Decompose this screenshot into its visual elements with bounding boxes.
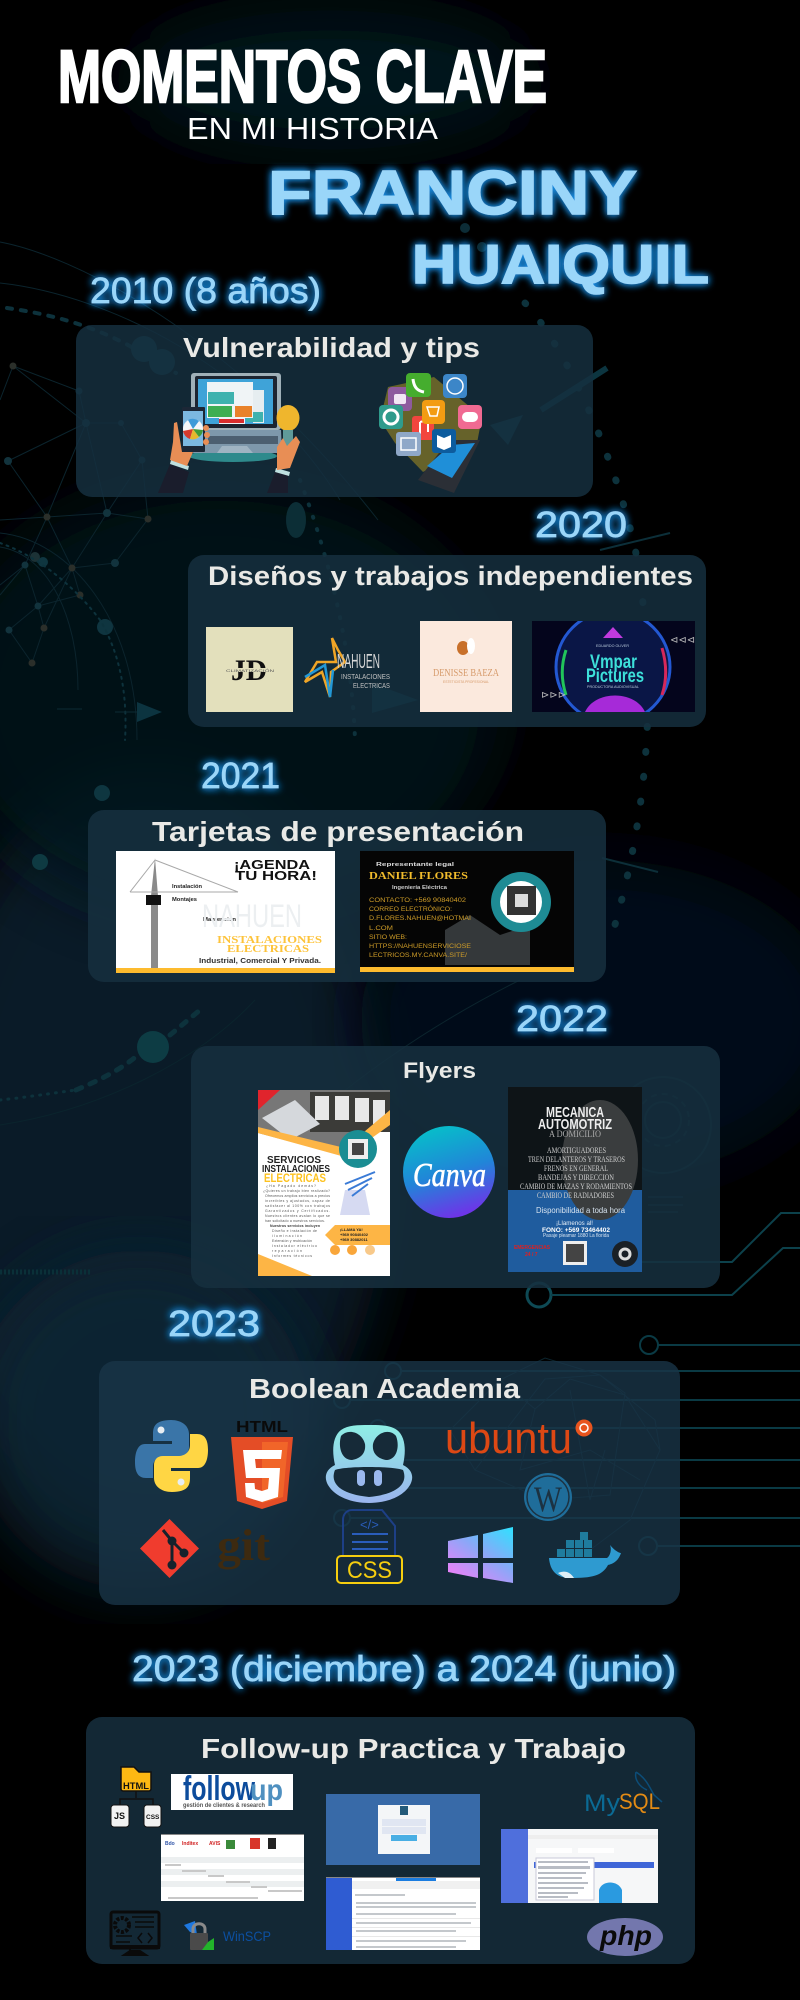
flyer: servicios instalaciones eléctricas: INSTALACIONES — [262, 1164, 330, 1175]
icon: html js css tree: CSS — [146, 1814, 160, 1821]
flyer: mecánica automotriz: CAMBIO DE MAZAS Y RODAMIENTOS — [520, 1182, 632, 1191]
icon: css file — [337, 1510, 402, 1584]
panel heading: Vulnerabilidad y tips — [183, 332, 480, 363]
panel: flyers — [191, 1046, 720, 1288]
card: agenda tu hora: TU HORA! — [235, 868, 317, 883]
title: Momentos clave: MOMENTOS CLAVE — [58, 35, 547, 118]
flyer: mecánica automotriz: ¡Llamenos al! — [556, 1221, 593, 1227]
screenshot: login — [326, 1794, 480, 1865]
icon: Canva logo: Canva — [413, 1157, 486, 1194]
card: agenda tu hora: Mantención — [203, 917, 236, 923]
year: 2010: 2010 (8 años) — [90, 270, 321, 311]
card: Daniel Flores: Ingeniería Eléctrica — [392, 885, 447, 891]
icon: smartphone with apps — [379, 373, 482, 493]
flyer: servicios instalaciones eléctricas: ¿Quieres un trabajo bien realizado? — [263, 1189, 330, 1193]
icon: html js css tree — [111, 1767, 161, 1827]
logo: Denisse Baeza: DENISSE BAEZA — [433, 668, 500, 679]
panel heading: Follow-up Practica y Trabajo — [201, 1733, 626, 1764]
icon: Canva logo — [403, 1126, 495, 1218]
flyer: servicios instalaciones eléctricas: ¿Ha Pagado demás? — [266, 1184, 316, 1188]
panel: boolean academia — [99, 1361, 680, 1605]
panel heading: Tarjetas de presentación — [152, 816, 524, 847]
card: agenda tu hora: Montajes — [172, 897, 197, 903]
logo: php: php — [599, 1920, 652, 1951]
year: 2021: 2021 — [201, 755, 280, 796]
name: Huaiquil: HUAIQUIL — [412, 233, 709, 295]
icon: docker — [549, 1532, 621, 1578]
card: agenda tu hora: NAHUEN — [202, 898, 302, 934]
icon: monitor with code — [110, 1912, 160, 1955]
year: 2022: 2022 — [516, 998, 608, 1039]
panel heading: Diseños y trabajos independientes — [208, 561, 693, 591]
icon: python — [135, 1420, 208, 1492]
flyer: servicios instalaciones eléctricas — [258, 1090, 390, 1276]
logo: Nahuen: ELECTRICAS — [353, 683, 390, 690]
icon: html js css tree: HTML — [123, 1781, 150, 1791]
icon: rounded mascot logo — [326, 1425, 412, 1503]
panel: follow-up práctica y trabajo — [86, 1717, 695, 1964]
panel: vulnerabilidad y tips — [76, 325, 593, 497]
flyer: servicios instalaciones eléctricas: reparación — [272, 1249, 302, 1253]
card: Daniel Flores: DANIEL FLORES — [369, 870, 468, 882]
flyer: servicios instalaciones eléctricas: Instalador eléctrico — [272, 1244, 317, 1248]
logo: Nahuen: NAHUEN — [337, 651, 380, 673]
flyer: servicios instalaciones eléctricas: increíbles y ajustados, capaz de — [265, 1199, 330, 1203]
flyer: mecánica automotriz: 24 / 7 — [525, 1252, 538, 1258]
flyer: mecánica automotriz: TREN DELANTEROS Y TRASEROS — [528, 1155, 625, 1164]
subtitle: EN MI HISTORIA — [187, 111, 438, 146]
logo: winscp — [184, 1921, 271, 1950]
card: agenda tu hora: ELECTRICAS — [227, 943, 309, 955]
card: agenda tu hora: Industrial, Comercial Y Privada. — [199, 958, 321, 965]
icon: css file: CSS — [347, 1557, 392, 1584]
icon: css file: </> — [360, 1517, 379, 1532]
screenshot: tabla de clientes: AVIS — [209, 1841, 221, 1847]
logo: Denisse Baeza — [420, 621, 512, 712]
flyer: servicios instalaciones eléctricas: ELECTRICAS — [264, 1171, 326, 1185]
flyer: mecánica automotriz: BANDEJAS Y DIRECCION — [538, 1173, 614, 1182]
flyer: mecánica automotriz: Disponibilidad a toda hora — [536, 1206, 626, 1215]
flyer: servicios instalaciones eléctricas: Extensión y reubicación — [272, 1239, 312, 1243]
logo: Vmpar Pictures: ⊲⊲⊲ — [670, 635, 695, 646]
card: Daniel Flores: D.FLORES.NAHUEN@HOTMAI — [369, 916, 471, 922]
flyer: servicios instalaciones eléctricas: han solicitado a nuestros servicios. — [265, 1219, 325, 1223]
year: 2023: 2023 — [168, 1303, 260, 1344]
logo: JD climatización — [206, 627, 293, 712]
icon: html js css tree: JS — [114, 1811, 125, 1821]
card: Daniel Flores: L.COM — [369, 926, 393, 932]
screenshot: dashboard — [501, 1829, 658, 1903]
flyer: mecánica automotriz: FONO: +569 73464402 — [542, 1228, 611, 1234]
logo: Vmpar Pictures: Pictures — [586, 666, 644, 687]
flyer: servicios instalaciones eléctricas: Nuestros servicios incluyen — [270, 1224, 320, 1228]
icon: wordpress: W — [534, 1479, 562, 1519]
logo: followup: up — [250, 1774, 283, 1807]
logo: php — [587, 1918, 663, 1956]
logo: JD climatización: JD — [231, 654, 267, 687]
logo: followup: follow — [183, 1770, 255, 1808]
panel: diseños y trabajos independientes — [188, 555, 706, 727]
card: Daniel Flores: Representante legal — [376, 862, 455, 868]
card: agenda tu hora: INSTALACIONES — [217, 934, 322, 946]
flyer: servicios instalaciones eléctricas: satisfacer al 100% con trabajos — [265, 1204, 330, 1208]
text: git wordmark: git — [217, 1521, 270, 1570]
screenshot: tabla de clientes — [161, 1834, 304, 1901]
flyer: mecánica automotriz: EMERGENCIAS — [514, 1245, 551, 1251]
card: Daniel Flores: HTTPS://NAHUENSERVICIOSE — [369, 944, 471, 950]
panel heading: Flyers — [403, 1058, 476, 1083]
flyer: mecánica automotriz: MECANICA — [546, 1104, 604, 1121]
card: Daniel Flores: LECTRICOS.MY.CANVA.SITE/ — [369, 953, 467, 959]
panel: tarjetas de presentación — [88, 810, 606, 982]
logo: Vmpar Pictures: PRODUCTORA AUDIOVISUAL — [587, 684, 640, 689]
logo: Denisse Baeza: ESTETICISTA PROFESIONAL — [443, 680, 489, 684]
card: agenda tu hora: ¡AGENDA — [234, 857, 311, 872]
icon: html5 — [231, 1419, 293, 1509]
flyer: servicios instalaciones eléctricas: Informes técnicos — [272, 1254, 312, 1258]
icon: html5: HTML — [236, 1419, 288, 1436]
year: 2020: 2020 — [535, 504, 627, 545]
logo: followup: gestión de clientes & research — [183, 1803, 265, 1809]
flyer: servicios instalaciones eléctricas: +569 30882011 — [340, 1237, 368, 1242]
flyer: servicios instalaciones eléctricas: Ofrecemos amplios servicios a precios — [265, 1194, 330, 1198]
card: Daniel Flores: CORREO ELECTRÓNICO: — [369, 906, 452, 913]
icon: ubuntu: ubuntu — [445, 1414, 572, 1463]
icon: git diamond — [140, 1519, 199, 1578]
logo: Nahuen — [305, 638, 390, 697]
logo: Nahuen: INSTALACIONES — [341, 674, 390, 681]
icon: laptop with hands — [158, 373, 300, 493]
flyer: servicios instalaciones eléctricas: Nuestros clientes avalan lo que se — [265, 1214, 330, 1218]
screenshot: tabla de clientes: Bdo — [165, 1841, 175, 1847]
flyer: mecánica automotriz: FRENOS EN GENERAL — [544, 1164, 608, 1173]
screenshot: tabla de encuestas — [326, 1877, 480, 1950]
panel heading: Boolean Academia — [249, 1373, 520, 1404]
icon: mysql: SQL — [619, 1789, 660, 1814]
screenshot: tabla de clientes: Inditex — [182, 1841, 198, 1847]
flyer: mecánica automotriz: AUTOMOTRIZ — [538, 1116, 612, 1133]
card: agenda tu hora: Instalación — [172, 884, 202, 890]
flyer: servicios instalaciones eléctricas: Diseño e instalación de — [272, 1229, 317, 1233]
flyer: mecánica automotriz: CAMBIO DE RADIADORES — [537, 1191, 614, 1200]
logo: Vmpar Pictures — [532, 621, 695, 712]
logo: Vmpar Pictures: Vmpar — [590, 652, 637, 673]
flyer: servicios instalaciones eléctricas: Garantizados y Certificados. — [265, 1209, 330, 1213]
flyer: mecánica automotriz — [508, 1087, 642, 1272]
card: Daniel Flores — [360, 851, 574, 972]
flyer: servicios instalaciones eléctricas: +569 90840402 — [340, 1232, 369, 1237]
card: Daniel Flores: CONTACTO: +569 90840402 — [369, 898, 467, 904]
logo: winscp: WinSCP — [223, 1928, 271, 1944]
icon: mysql — [584, 1772, 662, 1817]
card: Daniel Flores: SITIO WEB: — [369, 935, 407, 941]
icon: windows — [448, 1527, 513, 1583]
logo: JD climatización: CLIMATIZACIÓN — [226, 668, 274, 673]
flyer: mecánica automotriz: AMORTIGUADORES — [547, 1146, 606, 1155]
flyer: mecánica automotriz: Pasaje pleamar 1880 La florida — [543, 1233, 609, 1239]
flyer: mecánica automotriz: A DOMICILIO — [549, 1129, 601, 1139]
icon: mysql: My — [584, 1790, 620, 1817]
card: agenda tu hora — [116, 851, 335, 973]
flyer: servicios instalaciones eléctricas: ¡LLAMA YA! — [340, 1227, 363, 1232]
logo: Vmpar Pictures: ⊳⊳⊳ — [541, 690, 566, 701]
year range: 2023 a 2024: 2023 (diciembre) a 2024 (junio) — [132, 1648, 676, 1689]
flyer: servicios instalaciones eléctricas: iluminación — [272, 1234, 302, 1238]
name: Franciny: FRANCINY — [268, 159, 637, 228]
flyer: servicios instalaciones eléctricas: SERVICIOS — [267, 1155, 321, 1166]
icon: wordpress — [524, 1473, 572, 1521]
logo: Vmpar Pictures: EDUARDO OLIVER — [596, 643, 629, 648]
